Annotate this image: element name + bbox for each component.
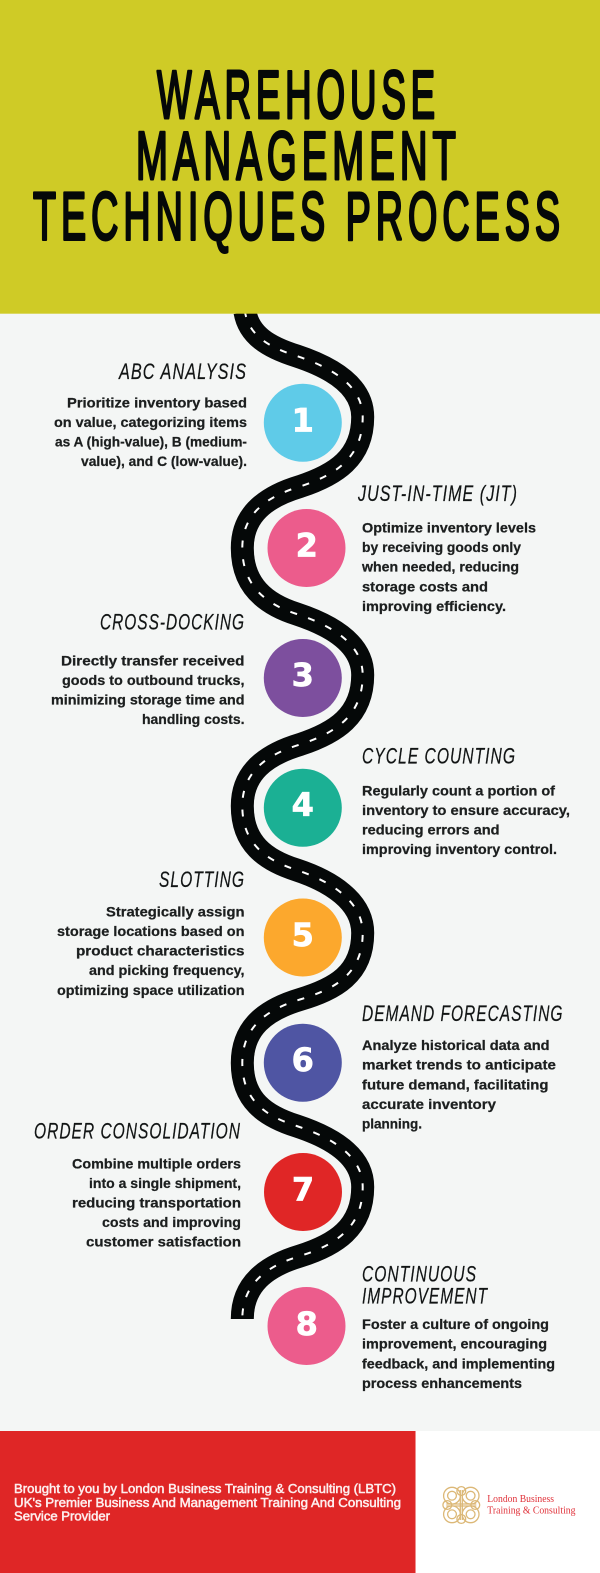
footer bbox=[0, 1431, 600, 1573]
badge 7 bbox=[264, 1153, 342, 1231]
text block: Just-in-time: storage costs and bbox=[362, 578, 488, 594]
text block: Cycle counting: reducing errors and bbox=[362, 822, 500, 838]
text block: Just-in-time: by receiving goods only bbox=[362, 539, 521, 555]
text block: Cycle counting: improving inventory control. bbox=[362, 841, 557, 857]
text block: Slotting: Strategically assign bbox=[106, 904, 244, 920]
step 4: Cycle counting bbox=[264, 743, 570, 857]
text block: Continuous improvement: feedback, and implementing bbox=[362, 1355, 555, 1371]
text block: Cycle counting bbox=[362, 782, 570, 857]
text block: Just-in-time: when needed, reducing bbox=[361, 559, 519, 575]
text block: Order consolidation bbox=[72, 1155, 241, 1250]
badge 6 bbox=[264, 1024, 342, 1102]
step 3: Cross-docking bbox=[51, 610, 342, 727]
text block: Demand forecasting: planning. bbox=[362, 1116, 422, 1132]
text block: Just-in-time: Optimize inventory levels bbox=[362, 520, 536, 536]
step 6: Demand forecasting bbox=[264, 1001, 564, 1132]
text block: Order consolidation: into a single shipment, bbox=[89, 1175, 241, 1191]
heading: Just-in-time: JUST-IN-TIME (JIT) bbox=[357, 481, 518, 506]
step 7: Order consolidation bbox=[34, 1118, 342, 1250]
text block: Slotting: storage locations based on bbox=[57, 923, 244, 939]
text block: Cross-docking: Directly transfer received bbox=[61, 652, 244, 668]
footer credit panel: UK's Premier Business And Management Training And Consulting bbox=[14, 1496, 401, 1510]
text block: Demand forecasting: future demand, facilitating bbox=[362, 1076, 548, 1092]
text block: Cycle counting: Regularly count a portion of bbox=[362, 782, 555, 798]
badge 2: 2 bbox=[296, 527, 318, 565]
text block: Slotting bbox=[57, 904, 245, 998]
text block: Continuous improvement: Foster a culture of ongoing bbox=[362, 1316, 549, 1332]
text block: Demand forecasting: accurate inventory bbox=[362, 1096, 496, 1112]
text block: Demand forecasting: Analyze historical data and bbox=[362, 1037, 550, 1053]
badge 8 bbox=[268, 1287, 346, 1365]
badge 6: 6 bbox=[292, 1041, 314, 1079]
badge 5 bbox=[264, 898, 342, 976]
title bbox=[33, 57, 565, 254]
text block: Continuous improvement: process enhancements bbox=[362, 1375, 522, 1391]
badge 3: 3 bbox=[292, 656, 314, 694]
text block: Cross-docking: minimizing storage time and bbox=[51, 692, 244, 708]
text block: ABC analysis: on value, categorizing items bbox=[54, 414, 247, 430]
footer credit panel bbox=[0, 1431, 416, 1573]
step 1: ABC analysis bbox=[54, 359, 342, 469]
text block: Demand forecasting bbox=[362, 1037, 556, 1132]
footer credit panel: Brought to you by London Business Training & Consulting (LBTC) bbox=[14, 1482, 396, 1496]
logo wordmark: London Business bbox=[487, 1494, 554, 1505]
heading: Continuous improvement: CONTINUOUS bbox=[362, 1262, 477, 1287]
heading: ABC analysis: ABC ANALYSIS bbox=[118, 359, 247, 384]
text block: ABC analysis bbox=[54, 394, 247, 469]
badge 4: 4 bbox=[292, 786, 314, 824]
badge 4 bbox=[264, 769, 342, 847]
logo panel bbox=[416, 1431, 600, 1573]
text block: Just-in-time bbox=[361, 520, 536, 614]
icon: celtic knot logo bbox=[443, 1487, 480, 1523]
badge 2 bbox=[268, 509, 346, 587]
badge 7: 7 bbox=[292, 1171, 314, 1209]
text block: Just-in-time: improving efficiency. bbox=[362, 598, 506, 614]
heading: Slotting: SLOTTING bbox=[159, 867, 245, 892]
text block: Order consolidation: costs and improving bbox=[102, 1214, 241, 1230]
text block: Cycle counting: inventory to ensure accuracy, bbox=[362, 802, 570, 818]
badge 5: 5 bbox=[292, 916, 314, 954]
text block: ABC analysis: Prioritize inventory based bbox=[67, 394, 247, 410]
text block: Slotting: and picking frequency, bbox=[89, 962, 244, 978]
badge 3 bbox=[264, 639, 342, 717]
logo wordmark bbox=[487, 1494, 576, 1516]
heading: Continuous improvement bbox=[362, 1262, 488, 1308]
text block: Cross-docking bbox=[51, 652, 244, 727]
text block: Order consolidation: reducing transportation bbox=[72, 1194, 241, 1210]
heading: Cycle counting: CYCLE COUNTING bbox=[362, 743, 516, 768]
heading: Order consolidation: ORDER CONSOLIDATION bbox=[34, 1118, 241, 1143]
text block: Cross-docking: goods to outbound trucks, bbox=[62, 672, 244, 688]
text block: Slotting: optimizing space utilization bbox=[57, 982, 244, 998]
header panel bbox=[0, 0, 600, 314]
badge 8: 8 bbox=[296, 1305, 318, 1343]
text block: Continuous improvement: improvement, encouraging bbox=[362, 1336, 547, 1352]
text block: Demand forecasting: market trends to anticipate bbox=[362, 1057, 556, 1073]
footer credit panel: Service Provider bbox=[14, 1510, 110, 1524]
heading: Continuous improvement: IMPROVEMENT bbox=[362, 1283, 488, 1308]
badge 1 bbox=[264, 384, 342, 462]
step 8: Continuous improvement bbox=[268, 1262, 555, 1391]
logo wordmark: Training & Consulting bbox=[487, 1505, 576, 1516]
text block: Slotting: product characteristics bbox=[76, 943, 245, 959]
text block: Continuous improvement bbox=[362, 1316, 555, 1391]
winding road bbox=[242, 312, 363, 1319]
heading: Cross-docking: CROSS-DOCKING bbox=[100, 610, 245, 634]
badge 1: 1 bbox=[292, 402, 314, 440]
text block: Order consolidation: customer satisfaction bbox=[86, 1234, 241, 1250]
text block: ABC analysis: value), and C (low-value). bbox=[81, 453, 247, 469]
text block: ABC analysis: as A (high-value), B (medium- bbox=[55, 434, 247, 450]
step 2: Just-in-time bbox=[268, 481, 536, 614]
text block: Cross-docking: handling costs. bbox=[142, 711, 244, 727]
step 5: Slotting bbox=[57, 867, 342, 998]
text block: Order consolidation: Combine multiple orders bbox=[72, 1155, 241, 1171]
